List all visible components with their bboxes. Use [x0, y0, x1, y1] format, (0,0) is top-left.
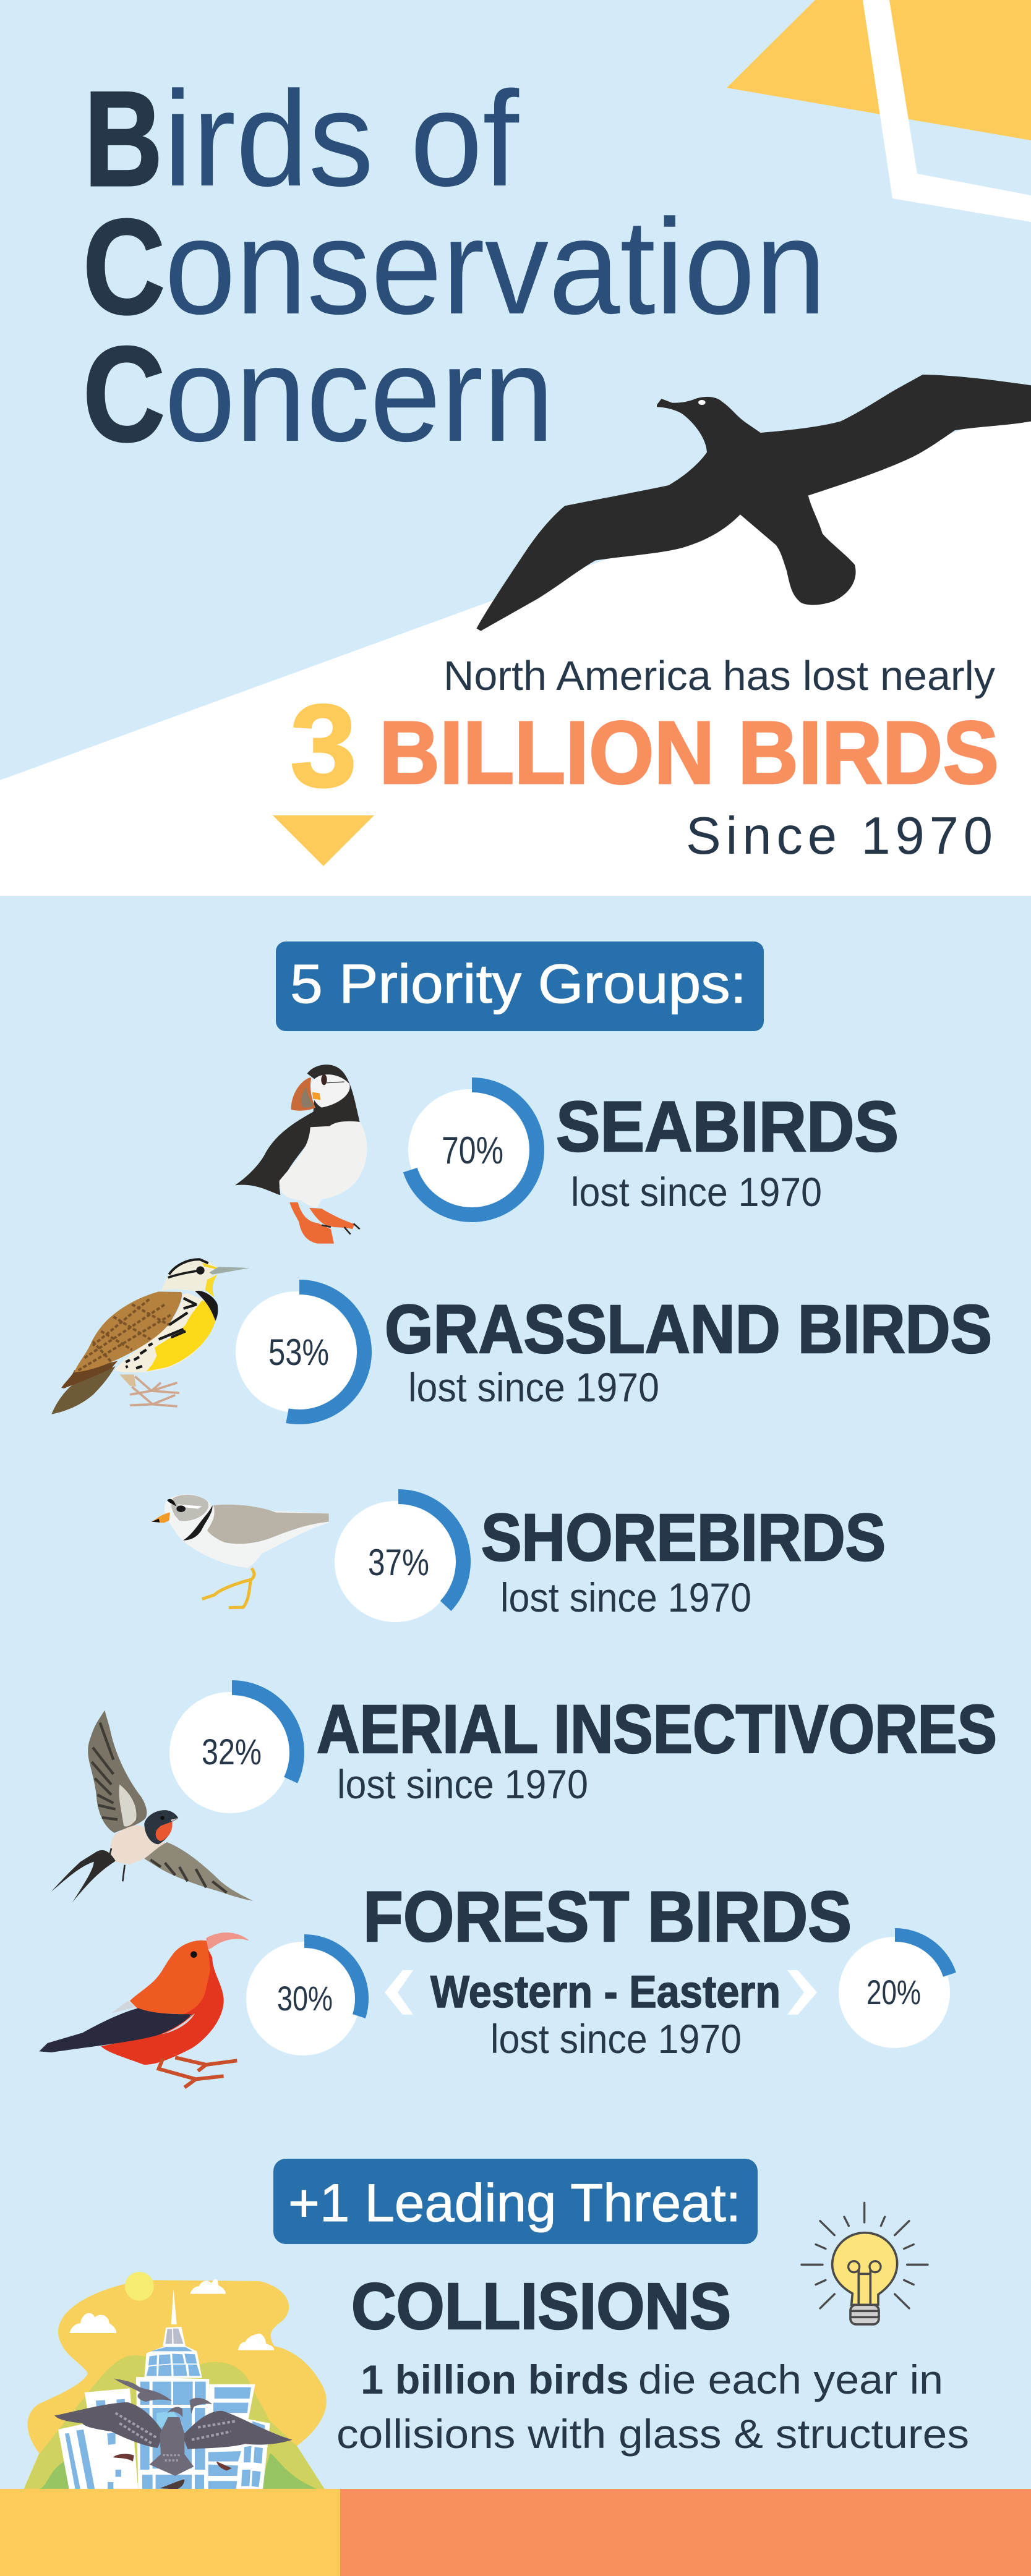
text: North America has lost nearly: North America has lost nearly: [443, 653, 996, 699]
text: since 1970: Since 1970: [686, 807, 993, 865]
heading: seabirds: SEABIRDS: [556, 1087, 899, 1167]
icon: right chevron: [787, 1970, 817, 2015]
title: C: [83, 192, 165, 342]
heading: 5 priority groups: [276, 942, 764, 1031]
chart: grassland 53%: 53%: [268, 1332, 329, 1373]
heading: grassland birds: [385, 1291, 992, 1410]
chart: grassland 53%: [234, 1287, 364, 1417]
heading: aerial insectivores: lost since 1970: [337, 1761, 588, 1807]
heading: collisions: COLLISIONS: [351, 2270, 731, 2343]
icon: left chevron: [385, 1970, 413, 2015]
icon: iiwi: [39, 1932, 249, 2088]
stat: 3 billion birds: BILLION BIRDS: [379, 703, 999, 802]
heading: shorebirds: [481, 1500, 886, 1620]
heading: +1 leading threat: [273, 2159, 758, 2244]
chart: aerial insectivores 32%: 32%: [202, 1732, 262, 1772]
icon: light bulb: [802, 2203, 928, 2324]
heading: seabirds: lost since 1970: [571, 1169, 822, 1215]
heading: aerial insectivores: [317, 1691, 997, 1807]
chart: eastern forest birds 20%: 20%: [866, 1973, 921, 2012]
icon: puffin: [235, 1065, 367, 1244]
title: [83, 64, 826, 470]
text: lost since 1970: lost since 1970: [490, 2016, 742, 2062]
title: onservation: [165, 192, 826, 342]
heading: grassland birds: GRASSLAND BIRDS: [385, 1291, 992, 1367]
text: 1 billion birds die each year: die each year in: [638, 2357, 943, 2402]
title: oncern: [165, 319, 554, 470]
chart: seabirds 70%: [407, 1085, 537, 1215]
footer: yellow and orange bars: [0, 2489, 1031, 2576]
text: western - eastern: Western - Eastern: [430, 1967, 781, 2017]
chart: western forest birds 30%: 30%: [277, 1979, 333, 2018]
stat: 3 billion birds: [290, 681, 999, 812]
stat: 3 billion birds: 3: [290, 681, 357, 812]
text: 1 billion birds die each year: collisions with glass & structures: [336, 2411, 969, 2457]
panel: white diagonal header area: [0, 404, 1031, 896]
title: irds of: [163, 64, 520, 215]
chart: eastern forest birds 20%: [837, 1935, 952, 2050]
icon: swallow: [51, 1711, 253, 1903]
text: 1 billion birds die each year: [336, 2357, 969, 2457]
chart: aerial insectivores 32%: [167, 1688, 297, 1817]
heading: shorebirds: lost since 1970: [500, 1575, 751, 1620]
chart: shorebirds 37%: 37%: [368, 1542, 429, 1583]
heading: 5 priority groups: 5 Priority Groups:: [290, 953, 747, 1014]
heading: grassland birds: lost since 1970: [408, 1364, 659, 1410]
heading: seabirds: [556, 1087, 899, 1215]
decoration: yellow corner shape: [727, 0, 1031, 222]
icon: yellow down arrow: [273, 815, 374, 866]
chart: seabirds 70%: 70%: [442, 1129, 503, 1172]
chart: shorebirds 37%: [333, 1497, 463, 1626]
title: B: [84, 64, 163, 215]
title: C: [83, 319, 165, 470]
icon: meadowlark: [51, 1259, 249, 1414]
heading: forest birds: FOREST BIRDS: [363, 1877, 852, 1957]
text: 1 billion birds die each year: 1 billion birds: [361, 2357, 629, 2402]
chart: western forest birds 30%: [246, 1941, 362, 2056]
icon: plover: [152, 1494, 329, 1608]
icon: flying bird silhouette: [476, 375, 1031, 631]
illustration: bird collision with buildings: [24, 2272, 327, 2489]
heading: shorebirds: SHOREBIRDS: [481, 1500, 886, 1575]
heading: +1 leading threat: +1 Leading Threat:: [288, 2174, 741, 2233]
